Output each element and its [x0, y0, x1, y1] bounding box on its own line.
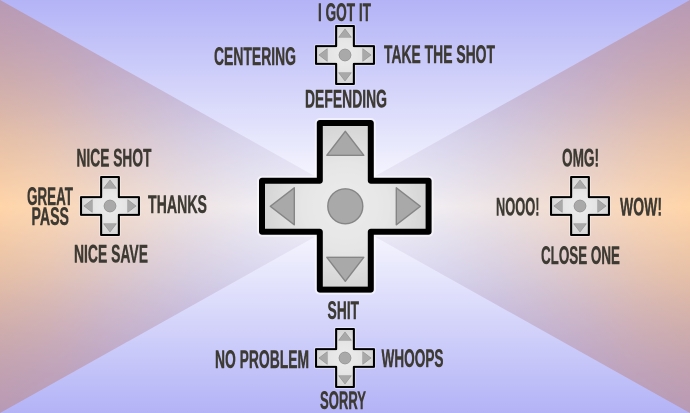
icon: large central d-pad	[262, 123, 429, 290]
label: whoops: WHOOPS	[382, 345, 444, 373]
label: thanks: THANKS	[148, 191, 207, 219]
left group: d-pad with labels	[27, 144, 207, 268]
background: left orange wedge	[0, 0, 345, 413]
icon: bottom d-pad	[316, 329, 374, 387]
top group: d-pad with labels	[214, 0, 495, 114]
right group: d-pad with labels	[496, 144, 662, 270]
label: nice shot: NICE SHOT	[76, 144, 152, 172]
label: shit: SHIT	[328, 297, 359, 325]
background: right orange wedge	[345, 0, 690, 413]
label: close one: CLOSE ONE	[541, 242, 620, 270]
bottom group: d-pad with labels	[215, 297, 444, 413]
label: no problem: NO PROBLEM	[215, 346, 309, 374]
background: right wedge mauve tint	[345, 0, 690, 413]
icon: left d-pad	[81, 177, 139, 235]
label: great: GREAT	[27, 183, 73, 211]
label: centering: CENTERING	[214, 43, 296, 71]
label: nooo: NOOO!	[496, 194, 540, 222]
label: nice save: NICE SAVE	[74, 240, 148, 268]
label: pass: PASS	[32, 203, 69, 231]
label: omg: OMG!	[562, 144, 599, 172]
icon: top d-pad	[316, 26, 374, 84]
label: defending: DEFENDING	[305, 86, 387, 114]
background: left wedge mauve tint	[0, 0, 345, 413]
label: take the shot: TAKE THE SHOT	[384, 41, 495, 69]
icon: right d-pad	[551, 177, 609, 235]
